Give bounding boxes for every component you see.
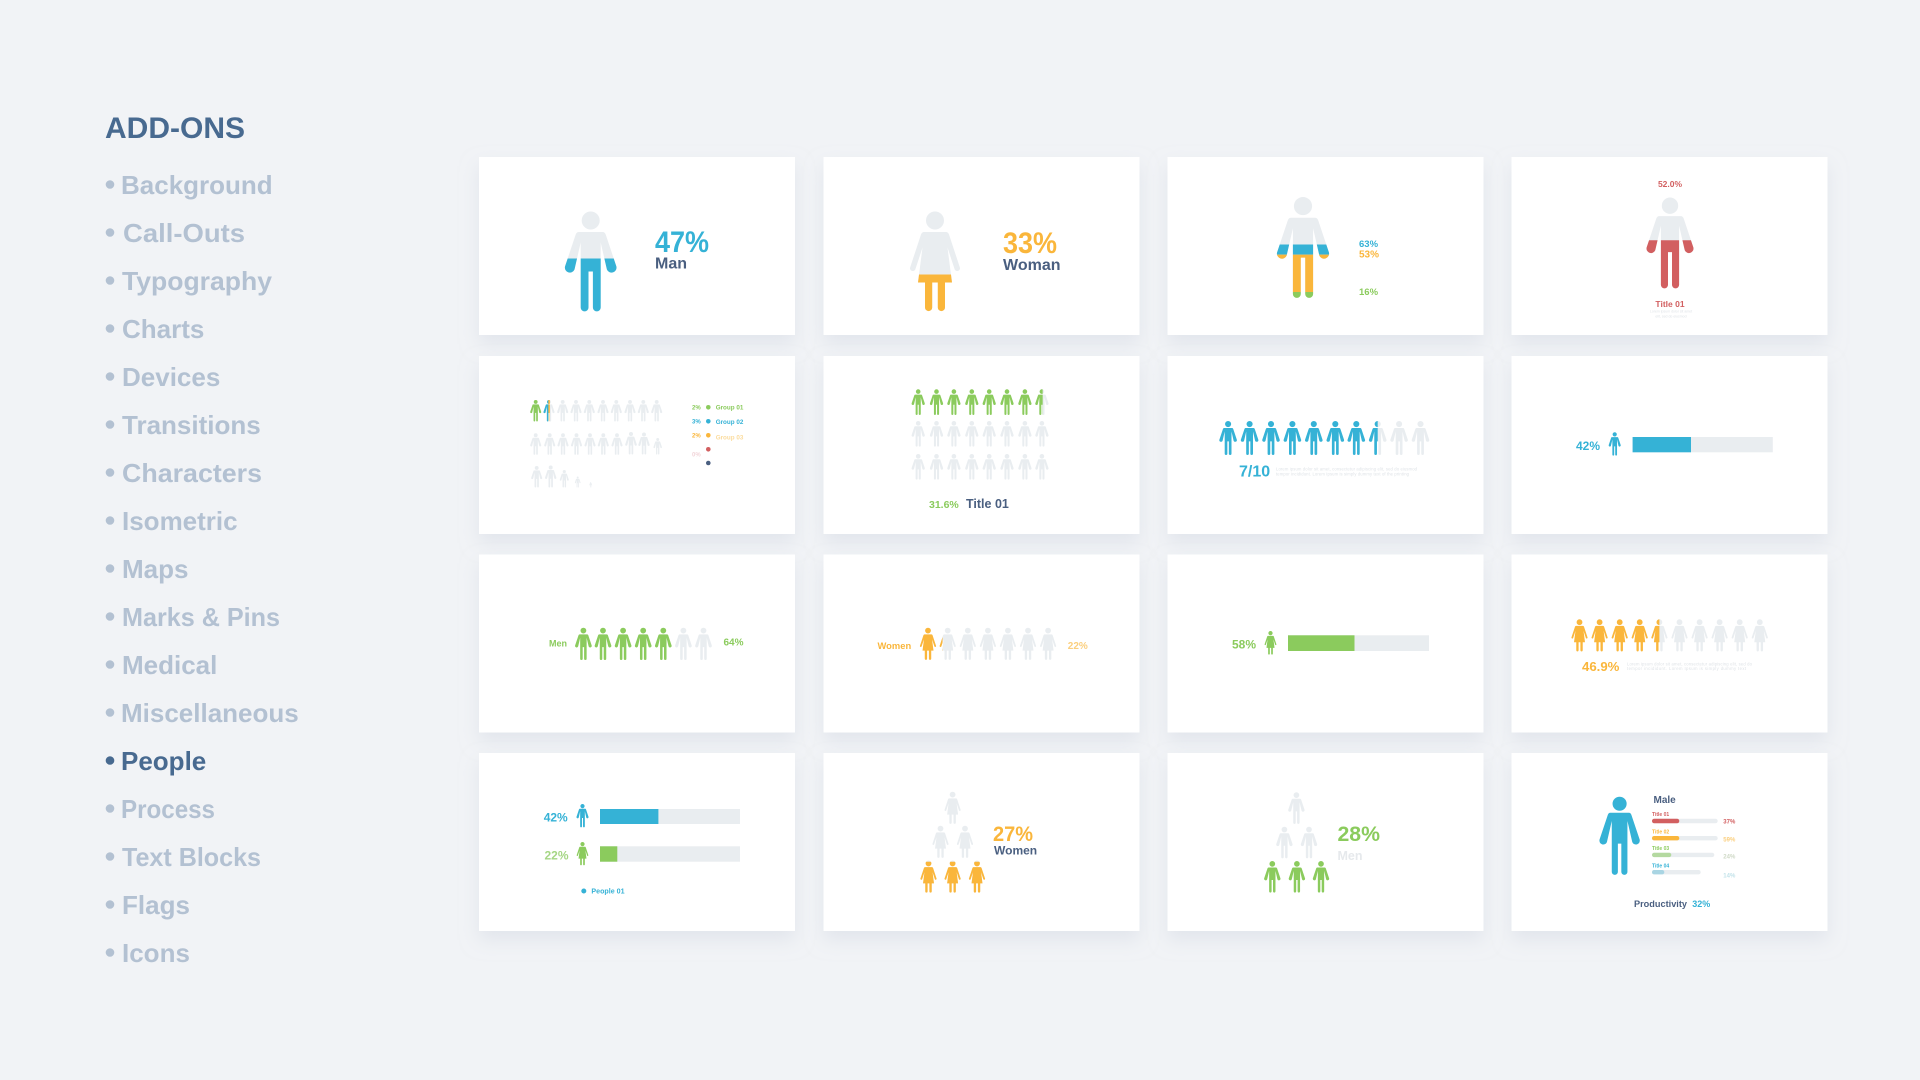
icon: blue man	[1599, 797, 1640, 875]
pictogram pyramid	[920, 792, 985, 893]
panel: 42% bar	[1512, 356, 1828, 534]
stat: 52.0%: 52.0%	[1658, 179, 1682, 189]
bar: Title 04	[1652, 863, 1736, 879]
progress bar	[1288, 635, 1429, 651]
nav item: Maps: Maps	[122, 554, 188, 584]
label: Title 01: Title 01	[1655, 299, 1685, 309]
placeholder text: Lorem ipsum dolor sit amet, consectetur adipiscing elit, sed do	[1627, 662, 1753, 666]
nav item: Miscellaneous: Miscellaneous	[121, 698, 299, 728]
panel: 31.6% grid	[824, 356, 1140, 534]
bar: Title 04: Title 04	[1652, 863, 1669, 869]
nav item: Characters: Characters	[122, 458, 262, 488]
nav item: Background: Background	[121, 170, 273, 200]
bar: Title 03: 24%	[1723, 855, 1736, 861]
pictogram row	[1571, 619, 1768, 651]
nav item: Marks & Pins: Marks & Pins	[122, 602, 280, 632]
legend: 2%	[692, 406, 701, 412]
nav item: Devices: Devices	[122, 362, 220, 392]
icon: segmented man	[1277, 197, 1329, 298]
placeholder text: elit, sed do eiusmod	[1655, 314, 1687, 318]
row: 22% woman bar	[544, 842, 740, 865]
stat: 33%: 33%	[1003, 227, 1057, 260]
stat: 53%: 53%	[1359, 250, 1379, 260]
stat: 64%: 64%	[724, 638, 744, 649]
row: 22% woman bar: 22%	[544, 848, 569, 862]
panel: two bars	[479, 753, 795, 931]
pictogram grid	[912, 389, 1049, 480]
nav item: Charts: Charts	[122, 314, 204, 344]
placeholder text: tempor incididunt. Lorem Ipsum is simply dummy text	[1627, 666, 1747, 671]
heading: Male: Male	[1654, 795, 1676, 806]
stat: 47%: 47%	[655, 226, 709, 259]
nav item: Call-Outs: Call-Outs	[123, 218, 245, 248]
nav item: Transitions: Transitions	[122, 410, 261, 440]
panel: women pyramid 27%	[824, 753, 1140, 931]
label: Women: Women	[878, 640, 911, 651]
sidebar navigation	[105, 112, 299, 968]
icon: woman	[1265, 631, 1276, 655]
label: Productivity: Productivity	[1634, 899, 1688, 910]
pictogram pyramid	[1264, 792, 1329, 893]
panel: men pyramid 28%	[1168, 753, 1484, 931]
bar: Title 03: Title 03	[1652, 846, 1669, 852]
icon: man filled 47%	[565, 212, 617, 311]
legend: Group 03	[716, 435, 744, 442]
bar: Title 02: 59%	[1723, 837, 1736, 843]
bar: Title 02	[1652, 829, 1736, 843]
icon: red man	[1647, 198, 1693, 288]
nav item: Isometric: Isometric	[122, 506, 238, 536]
stat: 58%: 58%	[1232, 638, 1256, 652]
bar: Title 02: Title 02	[1652, 829, 1669, 835]
placeholder text	[1276, 466, 1418, 476]
legend: People 01: People 01	[591, 887, 625, 895]
stat: 27%: 27%	[993, 823, 1033, 846]
bar: Title 01: Title 01	[1652, 812, 1669, 818]
icon: woman filled 33%	[910, 212, 960, 311]
pictogram grid	[530, 400, 662, 487]
nav item: Icons: Icons	[122, 938, 190, 968]
panel: male productivity	[1512, 753, 1828, 931]
label: Title 01: Title 01	[966, 497, 1009, 511]
legend: Group 02	[716, 419, 744, 426]
stat: 22%: 22%	[1068, 641, 1088, 652]
legend: 2%	[692, 434, 701, 440]
placeholder text	[1627, 662, 1753, 671]
stat: 46.9%: 46.9%	[1582, 659, 1620, 674]
label: Woman: Woman	[1003, 257, 1060, 274]
bar: Title 01: 37%	[1723, 820, 1736, 826]
panel: man 52.0%	[1512, 157, 1828, 335]
progress bar	[1633, 437, 1773, 452]
stat: 28%: 28%	[1338, 823, 1380, 846]
panel: man 47%	[479, 157, 795, 335]
panel: men 64%	[479, 554, 795, 732]
legend: 3%	[692, 420, 701, 426]
stat: 63%: 63%	[1359, 239, 1379, 250]
row: 42% man bar	[544, 804, 740, 827]
placeholder text	[1650, 310, 1692, 318]
bar: Title 03	[1652, 846, 1736, 861]
panel: 58% bar	[1168, 554, 1484, 732]
pictogram row	[1219, 421, 1429, 455]
label: Man: Man	[655, 256, 687, 272]
placeholder text: tempor incididunt. Lorem Ipsum is simply dummy text of the printing	[1276, 472, 1410, 476]
placeholder text: Lorem ipsum dolor sit amet, consectetur adipiscing elit, sed do eiusmod	[1276, 466, 1418, 472]
stat: 7/10: 7/10	[1239, 464, 1270, 481]
label: Men: Men	[549, 639, 567, 649]
pictogram row	[575, 628, 712, 660]
panel: group pictogram	[479, 356, 795, 534]
nav item: Medical: Medical	[122, 650, 217, 680]
nav item: Process: Process	[121, 794, 215, 824]
nav item: People (active): People	[121, 746, 206, 776]
panel: woman 33%	[824, 157, 1140, 335]
legend: 0%	[692, 453, 701, 459]
stat: 16%: 16%	[1359, 287, 1379, 298]
row: 42% man bar: 42%	[544, 811, 568, 825]
nav item: Typography: Typography	[122, 266, 273, 296]
label: Women: Women	[994, 844, 1037, 858]
legend: Group 01	[716, 404, 744, 412]
nav item: Text Blocks: Text Blocks	[122, 842, 261, 872]
stat: 42%: 42%	[1576, 439, 1600, 453]
placeholder text: Lorem ipsum dolor sit amet	[1650, 310, 1692, 314]
pictogram row	[920, 628, 1056, 660]
stat: 31.6%: 31.6%	[929, 499, 959, 511]
label: Men: Men	[1338, 849, 1362, 863]
stat: 32%: 32%	[1692, 899, 1710, 909]
panel: man with three segments	[1168, 157, 1484, 335]
sidebar heading: ADD-ONS	[105, 112, 245, 145]
bar: Title 04: 14%	[1723, 873, 1736, 879]
nav item: Flags: Flags	[122, 890, 190, 920]
icon: man	[1609, 432, 1621, 456]
panel: women 22%	[824, 554, 1140, 732]
panel: 46.9% women row	[1512, 554, 1828, 732]
legend	[692, 404, 744, 465]
bar: Title 01	[1652, 812, 1736, 826]
panel: 7/10 people	[1168, 356, 1484, 534]
